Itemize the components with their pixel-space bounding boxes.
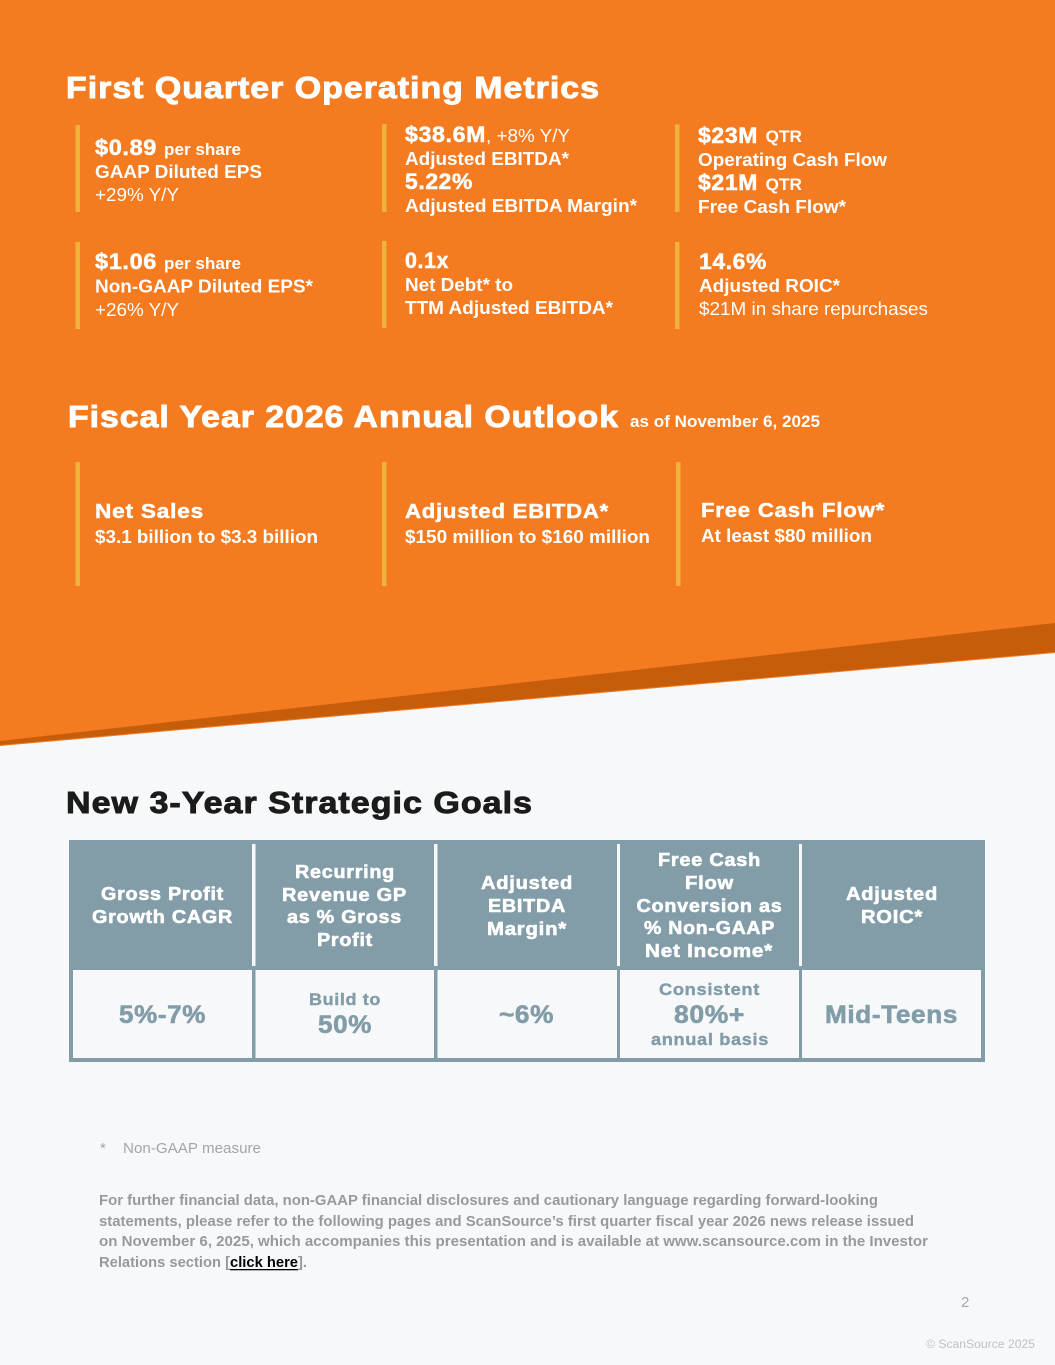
column: recurring revenue GP: Build to — [309, 990, 381, 1009]
panel: adjusted ROIC: 14.6% — [699, 249, 767, 274]
column: recurring revenue GP — [282, 861, 407, 1039]
panel: cash flow: QTR — [766, 128, 802, 146]
heading: new 3-year strategic goals: New 3-Year Strategic Goals — [66, 785, 533, 820]
page number: 2 — [961, 1294, 969, 1311]
panel: free cash flow outlook — [676, 462, 885, 586]
disclosure text block — [99, 1192, 928, 1271]
heading: first quarter operating metrics: First Quarter Operating Metrics — [66, 70, 600, 105]
panel: net debt: TTM Adjusted EBITDA* — [405, 297, 614, 318]
table: strategic goals — [69, 840, 985, 1062]
column: gross profit growth CAGR: Growth CAGR — [92, 906, 233, 927]
panel: adjusted EBITDA: , +8% Y/Y — [486, 125, 570, 146]
panel: adjusted EBITDA outlook — [382, 462, 650, 586]
column: free cash flow conversion — [636, 849, 782, 1049]
column: recurring revenue GP: Recurring — [295, 861, 395, 882]
panel: GAAP diluted EPS: per share — [164, 141, 241, 159]
panel: adjusted EBITDA outlook: Adjusted EBITDA* — [405, 501, 609, 523]
column: adjusted EBITDA margin: ~6% — [499, 1001, 554, 1029]
column: adjusted EBITDA margin: Margin* — [487, 918, 567, 939]
column: adjusted EBITDA margin — [481, 872, 573, 1029]
footnote: non-GAAP measure: * — [100, 1140, 106, 1157]
panel: adjusted EBITDA outlook: $150 million to $160 million — [405, 526, 650, 547]
column: adjusted ROIC: Adjusted — [846, 883, 938, 904]
panel: net sales outlook — [76, 462, 318, 586]
column: free cash flow conversion: Flow — [685, 872, 734, 893]
column: free cash flow conversion: Conversion as — [636, 895, 782, 916]
panel: adjusted EBITDA: Adjusted EBITDA Margin* — [405, 195, 638, 216]
column: recurring revenue GP: Revenue GP — [282, 884, 407, 905]
panel: adjusted EBITDA — [382, 122, 638, 216]
copyright: © ScanSource 2025 — [926, 1339, 1035, 1351]
panel: net sales outlook: $3.1 billion to $3.3 billion — [95, 526, 318, 547]
panel: adjusted EBITDA: $38.6M — [405, 122, 486, 147]
column: gross profit growth CAGR: 5%-7% — [119, 1001, 206, 1029]
panel: non-GAAP diluted EPS: Non-GAAP Diluted EPS* — [95, 276, 314, 296]
panel: GAAP diluted EPS: $0.89 — [95, 135, 157, 160]
panel: net debt: Net Debt* to — [405, 274, 513, 295]
column: free cash flow conversion: annual basis — [651, 1030, 769, 1049]
panel: adjusted EBITDA: 5.22% — [405, 169, 473, 194]
panel: non-GAAP diluted EPS: $1.06 — [95, 249, 157, 274]
column: gross profit growth CAGR — [92, 883, 233, 1029]
disclosure text block: click here — [230, 1254, 298, 1271]
panel: cash flow: Free Cash Flow* — [698, 196, 847, 217]
column: recurring revenue GP: Profit — [317, 929, 373, 950]
footnote: non-GAAP measure: Non-GAAP measure — [123, 1140, 261, 1157]
heading: fiscal year 2026 annual outlook — [68, 399, 820, 434]
disclosure text block: statements, please refer to the following pages and ScanSource’s first quarter fiscal year 2026 news release issued — [99, 1213, 914, 1230]
panel: GAAP diluted EPS — [76, 125, 262, 212]
panel: adjusted ROIC: Adjusted ROIC* — [699, 275, 841, 296]
panel: net debt: 0.1x — [405, 248, 449, 273]
panel: non-GAAP diluted EPS: per share — [164, 255, 241, 273]
column: free cash flow conversion: 80%+ — [674, 1001, 745, 1029]
column: gross profit growth CAGR: Gross Profit — [101, 883, 224, 904]
disclosure text block: Relations section [ — [99, 1254, 230, 1271]
panel: GAAP diluted EPS: GAAP Diluted EPS — [95, 161, 262, 182]
panel: cash flow: $21M — [698, 170, 758, 195]
column: adjusted ROIC: Mid-Teens — [825, 1001, 958, 1029]
panel: cash flow: $23M — [698, 123, 758, 148]
column: recurring revenue GP: as % Gross — [287, 906, 402, 927]
panel: GAAP diluted EPS: +29% Y/Y — [95, 184, 179, 205]
orange header background with diagonal edge — [0, 0, 1055, 746]
heading: fiscal year 2026 annual outlook: Fiscal Year 2026 Annual Outlook — [68, 399, 619, 434]
panel: free cash flow outlook: At least $80 million — [701, 525, 872, 546]
column: adjusted EBITDA margin: EBITDA — [488, 895, 566, 916]
panel: free cash flow outlook: Free Cash Flow* — [701, 500, 885, 522]
disclosure text block: on November 6, 2025, which accompanies this presentation and is available at www.scansource.com in the Investor — [99, 1233, 928, 1250]
disclosure text block: ]. — [298, 1254, 307, 1271]
panel: cash flow: QTR — [766, 176, 802, 194]
panel: cash flow — [675, 123, 888, 217]
column: free cash flow conversion: Consistent — [659, 980, 760, 999]
panel: non-GAAP diluted EPS — [76, 242, 314, 329]
disclosure text block: For further financial data, non-GAAP financial disclosures and cautionary language regarding forward-looking — [99, 1192, 878, 1209]
panel: adjusted ROIC — [675, 242, 928, 329]
panel: net sales outlook: Net Sales — [95, 501, 204, 523]
column: free cash flow conversion: % Non-GAAP — [644, 917, 775, 938]
panel: non-GAAP diluted EPS: +26% Y/Y — [95, 299, 179, 320]
column: adjusted ROIC: ROIC* — [861, 906, 923, 927]
column: free cash flow conversion: Net Income* — [645, 940, 773, 961]
heading: fiscal year 2026 annual outlook: as of November 6, 2025 — [630, 413, 820, 431]
column: free cash flow conversion: Free Cash — [658, 849, 761, 870]
panel: net debt — [382, 241, 614, 328]
panel: cash flow: Operating Cash Flow — [698, 149, 888, 170]
column: adjusted EBITDA margin: Adjusted — [481, 872, 573, 893]
panel: adjusted EBITDA: Adjusted EBITDA* — [405, 148, 570, 169]
column: recurring revenue GP: 50% — [318, 1011, 372, 1039]
panel: adjusted ROIC: $21M in share repurchases — [699, 298, 928, 319]
column: adjusted ROIC — [825, 883, 958, 1029]
